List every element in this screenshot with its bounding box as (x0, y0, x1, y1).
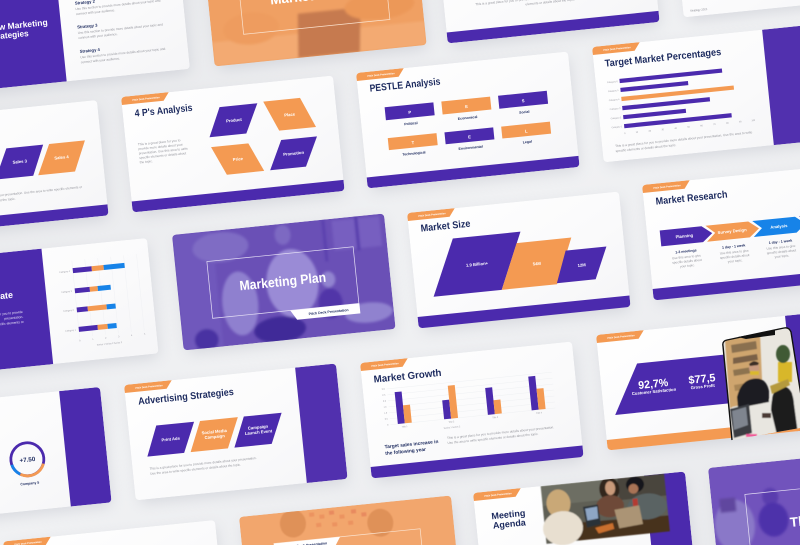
icon: phone with office photo (722, 327, 800, 440)
slide: Market Research: specific details about (672, 258, 702, 265)
slide: PESTLE Analysis: Technological (402, 150, 426, 157)
subtitle tab: Pitch Deck Presentation (308, 308, 349, 316)
subtitle tab (290, 303, 360, 320)
slide: Market Size (407, 191, 631, 332)
bar chart (382, 376, 546, 429)
bar chart: Series 1 Series 2 (444, 425, 461, 430)
slide: Market Research (642, 163, 800, 304)
slide: Market Research: Pitch Deck Presentation (653, 184, 681, 190)
slide: Customer Satisfaction with phone: Gross Profit (690, 383, 716, 390)
stacked bars (59, 263, 131, 333)
slide: New Marketing Strategies: connect with your audience. (76, 8, 116, 16)
slide: Target Market Percentages: Category 1 (611, 125, 623, 129)
slide: Target Market Percentages: Category 3 (610, 107, 621, 111)
slide: Market Size: 54M (532, 261, 542, 267)
slide: stacked bar chart rate: 0 (79, 340, 81, 342)
slide: Market Research: Analysis (770, 223, 788, 230)
slide: Customer Satisfaction with phone (596, 313, 800, 454)
slide: Target Market Percentages: Category 5 (608, 89, 619, 93)
slide: Market Growth: Target sales increase in (384, 439, 439, 450)
donut chart (9, 441, 45, 477)
stacked bars: Category 4 (59, 270, 71, 274)
slide: orange bottom cover (239, 493, 463, 545)
slide: Market Research: 1-3 meetings (675, 248, 697, 254)
slide: top centre slide with text and strip (436, 0, 660, 47)
slide: Market Growth: the following year (385, 447, 426, 457)
slide: Target Market Percentages: Pitch Deck Presentation (603, 46, 631, 52)
slide: PESTLE Analysis: E (468, 134, 471, 139)
slide: Market Growth (360, 341, 584, 482)
slide: Target Market Percentages: 10 (636, 132, 639, 134)
slide: Target Market Percentages: Target Market Percentages (604, 47, 722, 70)
slide: Sales parallelograms: Sales 4 (54, 154, 70, 161)
slide: Company donut (0, 387, 112, 528)
slide: 4 P's Analysis: Pitch Deck Presentation (132, 96, 160, 102)
slide: stacked bar chart rate (0, 238, 159, 379)
slide: PESTLE Analysis: Economical (458, 115, 478, 121)
slide: PESTLE Analysis: Political (404, 121, 418, 126)
slide: 4 P's Analysis: specific elements or details about (139, 151, 186, 160)
slide: Advertising Strategies: Print Ads (161, 436, 181, 442)
slide: PESTLE Analysis (356, 51, 580, 192)
slide: Market Growth: Market Growth (373, 368, 442, 386)
slide: stacked bar chart rate: 1 (92, 339, 94, 341)
slide: 4 P's Analysis: Promotion (283, 150, 305, 157)
slide: Target Market Percentages: 30 (661, 129, 665, 131)
slide: PESTLE Analysis: Legal (523, 140, 532, 144)
slide: Company donut: +7.50 (19, 456, 36, 464)
slide: Advertising Strategies: Campaign (248, 424, 269, 431)
slide: Target Market Percentages: 50 (687, 126, 691, 129)
slide: orange market cover (203, 0, 427, 70)
slide: Market Growth: Pitch Deck Presentation (371, 362, 399, 368)
slide: 4 P's Analysis: provide more details about your (138, 142, 184, 151)
slide: Market Research: 1 day - 1 week (769, 239, 792, 245)
slide: Target Market Percentages: 70 (713, 124, 717, 126)
slide: Target Market Percentages: This is a great place for you to provide more details about your presentation. Use the area to write (615, 130, 753, 148)
slide: Market Growth: Use the area to write specific elements or details about the topic. (447, 432, 539, 445)
slide: Market Research: Use this area to give (672, 253, 701, 260)
slide: Customer Satisfaction with phone: Pitch Deck Presentation (607, 334, 635, 340)
slide: 4 P's Analysis (121, 75, 345, 216)
bar chart: Title 3 (492, 416, 499, 419)
slide: Marketing Plan cover (172, 213, 396, 354)
slide: Market Research: Survey Design (717, 227, 747, 235)
slide: PESTLE Analysis: Social (519, 110, 530, 115)
slide: stacked bar chart rate: 4 (131, 335, 133, 337)
slide: Market Research: Planning (675, 233, 694, 239)
slide: New Marketing Strategies: Strategy 3 (77, 22, 98, 30)
bar chart: 2.0 (383, 400, 387, 403)
slide: 4 P's Analysis: Price (233, 156, 244, 162)
slide: New Marketing Strategies: Use this section to provide more details about your topic and (80, 47, 166, 59)
slide: Meeting Agenda (473, 469, 697, 545)
slide: Target Market Percentages: 80 (726, 123, 730, 125)
slide: Advertising Strategies: Campaign (204, 433, 225, 440)
slide: PESTLE Analysis: S (522, 98, 525, 103)
slide: New Marketing Strategies: connect with your audience. (81, 56, 120, 64)
slide: Advertising Strategies: Social Media (201, 428, 228, 435)
slide: stacked bar chart rate: 5 (144, 334, 146, 336)
slide: Sales parallelograms: Sales 3 (12, 158, 28, 165)
slide: Target Market Percentages: 0 (624, 133, 626, 135)
slide: Market Size: 1.9 Billion+ (466, 261, 489, 268)
slide: stacked bar chart rate: presentation. (4, 315, 24, 321)
slide: Meeting Agenda: Meeting (491, 508, 526, 521)
slide: Advertising Strategies: Use the area to write specific elements or details about the topic. (150, 463, 241, 476)
slide: 4 P's Analysis: the topic. (140, 159, 153, 164)
bar chart: 3.0 (382, 389, 386, 391)
slide: top right white card (672, 0, 800, 21)
slide: Target Market Percentages: Category 2 (610, 116, 622, 120)
slide: Target Market Percentages: Category 4 (609, 98, 620, 102)
slide: stacked bar chart rate: 2 (105, 338, 107, 340)
slide: Market Research: your topic. (728, 258, 743, 264)
slide: 4 P's Analysis: Product (226, 117, 243, 123)
slide: New Marketing Strategies: connect with your audience. (78, 32, 118, 40)
slide: stacked bar chart rate: 3 (118, 336, 120, 338)
slide: New Marketing Strategies: Strategy 4 (79, 47, 101, 54)
slide: Target Market Percentages: specific elements or details about the topic. (615, 143, 677, 153)
slide: Advertising Strategies: This is a great place for you to provide more details about your presentation. (149, 456, 257, 471)
slide: Customer Satisfaction with phone: Customer Satisfaction (632, 387, 677, 396)
slide: Market Research: 1 day - 1 week (722, 243, 746, 250)
stacked bars: Category 3 (61, 290, 73, 294)
slide: Market Research: Use this area to give (720, 249, 749, 255)
slide: Target Market Percentages: 90 (739, 121, 742, 124)
slide: New Marketing Strategies: Use this section to provide more details about your topic and (78, 22, 163, 35)
slide: bottom left card (3, 520, 227, 545)
photo of team under purple overlay (172, 214, 395, 353)
slide: Thank You cover (708, 458, 800, 545)
slide: Target Market Percentages: 100 (751, 120, 756, 122)
title: Marketing Plan (239, 270, 327, 293)
slide: 4 P's Analysis: 4 P's Analysis (134, 103, 193, 120)
slide: PESTLE Analysis: Environmental (458, 145, 483, 151)
slide: 4 P's Analysis: This is a great place for you to (138, 138, 181, 147)
stacked bars: Category 2 (63, 309, 75, 313)
bar chart: 0.5 (385, 418, 389, 421)
slide: Market Research: specific details about (767, 248, 796, 255)
slide: 4 P's Analysis: presentation. Use this area to write (139, 147, 188, 155)
slide: PESTLE Analysis: Pitch Deck Presentation (367, 72, 395, 78)
slide: Meeting Agenda: Pitch Deck Presentation (484, 492, 512, 498)
slide: Market Research: Use this area to give (766, 244, 796, 251)
bar chart: Title 4 (536, 411, 543, 415)
title frame (207, 247, 359, 318)
slide: Sales parallelograms (0, 100, 109, 241)
slide: PESTLE Analysis: E (465, 104, 468, 109)
slide: stacked bar chart rate: Series 1 Series 2 Series 3 (97, 341, 123, 347)
slide: Target Market Percentages: 40 (674, 128, 678, 130)
slide: Market Research: your topic. (680, 263, 695, 269)
slide: PESTLE Analysis: L (525, 128, 528, 134)
slide: Market Research: your topic. (774, 253, 790, 259)
slide: Customer Satisfaction with phone: $77,5 (688, 372, 716, 387)
bar chart: Title 1 (402, 425, 409, 429)
slide: PESTLE Analysis: P (408, 110, 412, 115)
slide: Market Size: 12M (577, 262, 586, 268)
slide: New Marketing Strategies (0, 0, 190, 94)
slide: Target Market Percentages (592, 25, 800, 166)
slide: 4 P's Analysis: Place (284, 111, 296, 118)
slide: top right white card: Strategy 2021 (690, 7, 708, 13)
slide: PESTLE Analysis: PESTLE Analysis (369, 77, 441, 95)
slide: Market Research: Market Research (655, 189, 728, 208)
slide: Target Market Percentages: 60 (700, 125, 704, 127)
bar chart: 0 (387, 424, 389, 427)
slide: Meeting Agenda: Agenda (492, 517, 527, 531)
slide: Advertising Strategies: Launch Event (245, 428, 273, 436)
slide: Market Research: specific details about (720, 253, 750, 260)
slide: Customer Satisfaction with phone: 92,7% (638, 377, 669, 392)
stacked bars: Category 1 (65, 329, 77, 333)
slide: Company donut: Company 5 (20, 481, 39, 486)
slide: Target Market Percentages: Category 6 (607, 80, 619, 84)
slide: Target Market Percentages: 20 (649, 130, 652, 133)
bar chart: 1.5 (384, 406, 388, 409)
slide: Market Size: Pitch Deck Presentation (418, 212, 446, 218)
slide: PESTLE Analysis: T (411, 140, 415, 145)
photo: three women around laptops (538, 472, 670, 545)
slide: Advertising Strategies: Pitch Deck Presentation (135, 384, 163, 390)
bar chart: 2.5 (382, 395, 386, 397)
slide: Advertising Strategies: Advertising Strategies (138, 387, 235, 408)
bar chart: Title 2 (448, 420, 455, 424)
bar chart: 1.0 (384, 412, 388, 415)
slide: Market Growth: This is a great place for you to provide more details about your presentation. (447, 425, 554, 440)
slide: Advertising Strategies (124, 363, 348, 504)
slide: Market Size: Market Size (420, 219, 471, 235)
